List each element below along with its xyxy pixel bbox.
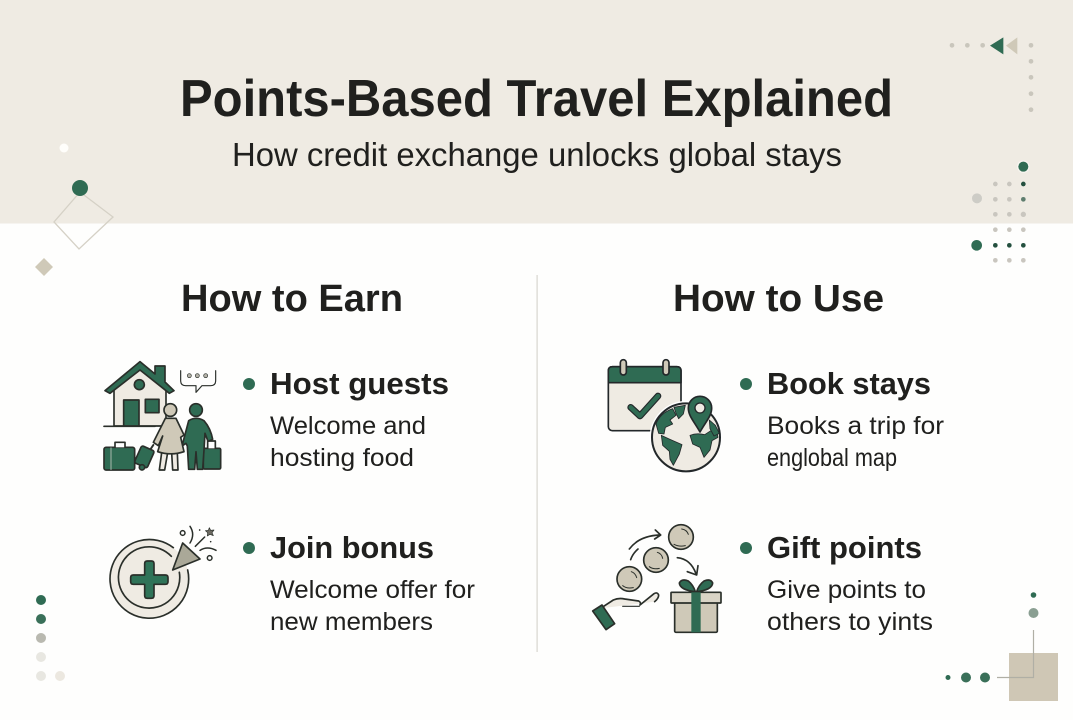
item: host guests	[243, 366, 449, 472]
icon: plus badge with party popper	[110, 526, 216, 618]
item description: Give points to	[767, 576, 926, 604]
subtitle: How credit exchange unlocks global stays	[232, 136, 842, 173]
column divider	[536, 275, 538, 652]
item description: others to yints	[767, 608, 933, 636]
item heading: Gift points	[767, 530, 922, 565]
header band	[0, 0, 1073, 224]
decoration: left diamond and dots	[35, 144, 113, 276]
item: book stays	[740, 366, 944, 472]
item description: hosting food	[270, 444, 414, 472]
item heading: Host guests	[270, 366, 449, 401]
item description: Books a trip for	[767, 412, 944, 440]
bullet	[243, 378, 255, 390]
bullet	[243, 542, 255, 554]
icon: calendar and globe with pin	[608, 360, 721, 473]
decoration: right dot grid	[971, 160, 1030, 263]
heading: how to use: How to Use	[673, 278, 884, 320]
decoration: bottom left dots	[36, 595, 65, 681]
item description: Welcome offer for	[270, 576, 475, 604]
item: gift points	[740, 530, 933, 636]
item heading: Join bonus	[270, 530, 434, 565]
decoration: bottom right square and dots	[946, 592, 1058, 701]
item description: Welcome and	[270, 412, 426, 440]
item heading: Book stays	[767, 366, 931, 401]
bullet	[740, 542, 752, 554]
icon: coins from hand to gift	[593, 525, 721, 632]
title: Points-Based Travel Explained	[180, 70, 893, 128]
item: join bonus	[243, 530, 475, 636]
heading: how to earn: How to Earn	[181, 278, 403, 320]
icon: house and travelling guests	[104, 362, 221, 470]
item description: englobal map	[767, 444, 897, 472]
item description: new members	[270, 608, 433, 636]
bullet	[740, 378, 752, 390]
decoration: top right arrows and dots	[950, 37, 1033, 112]
